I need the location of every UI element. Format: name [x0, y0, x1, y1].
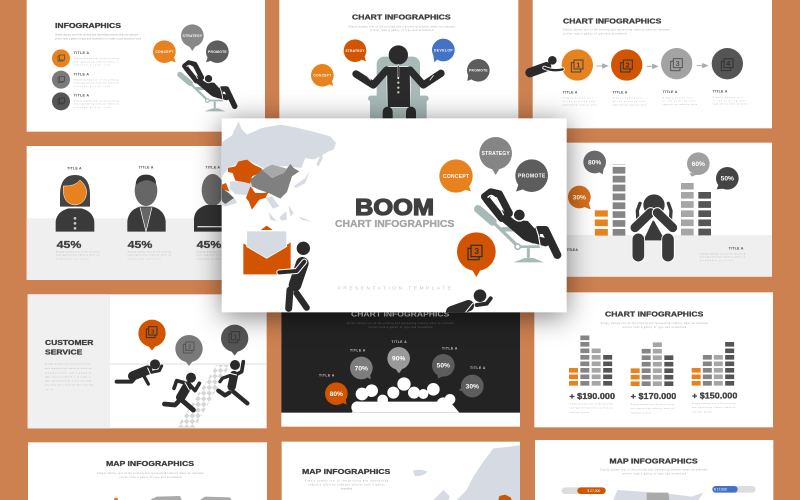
bubble: promote: PROMOTE — [518, 173, 546, 179]
text block: intro — [347, 322, 455, 329]
text block: captions: and typesetting industry when an — [128, 254, 171, 257]
bubble: 80 percent: 80% — [330, 391, 343, 398]
arrow — [697, 64, 707, 68]
bar chart: left — [601, 164, 619, 236]
figures: 45 percent: 45% — [128, 240, 152, 251]
text block: intro: printer took a galley of type and scrambled — [119, 476, 182, 479]
figure: plus 190,000: unknown printer — [569, 411, 590, 414]
map: usa — [613, 490, 703, 500]
text block: captions: and typesetting industry when an — [56, 254, 99, 257]
bar chart: right — [687, 183, 705, 235]
text block: captions — [56, 250, 222, 261]
figure: plus 170,000: and typesetting industry when an — [631, 407, 674, 410]
text block: description: Simply dummy text of the printing — [45, 363, 89, 366]
icon: hand over step 1 — [544, 68, 563, 70]
panel: cover slide — [222, 118, 567, 315]
bubble: concept: CONCEPT — [443, 174, 469, 180]
pin 1 — [221, 325, 248, 356]
list: three titled items — [52, 49, 118, 110]
panel: slide reclining infographics — [27, 0, 265, 132]
text block: intro — [97, 472, 204, 479]
person: third with laptop: TITLE A — [205, 166, 220, 170]
text block: captions: unknown printer — [128, 258, 161, 261]
text block: intro — [563, 29, 670, 36]
list: three titled items: unknown printer took — [74, 64, 110, 67]
list: three titled items: Simply dummy text of the printing — [74, 99, 118, 102]
figures: 45 percent — [57, 240, 221, 251]
labels: step titles and text: of the printing and — [613, 100, 644, 103]
icon: person reclining in chair — [180, 63, 235, 111]
heading: customer service: SERVICE — [45, 348, 82, 357]
bar chart: 170,000 — [635, 342, 669, 386]
text block: captions: Simply dummy text — [197, 250, 222, 253]
labels: unknown printer — [700, 259, 734, 262]
bubble: 50 percent: 50% — [437, 363, 450, 370]
panel: slide numbered process — [530, 0, 772, 128]
bubble: 80 percent: TITLE A — [319, 374, 335, 378]
figure: plus 190,000: + $190.000 — [569, 392, 616, 401]
figures: 45 percent: 45% — [57, 240, 81, 251]
labels: Simply dummy text of the printing — [700, 252, 745, 255]
figure: plus 170,000: Simply dummy text of the printing — [631, 403, 674, 406]
text block: captions: Simply dummy text of the printing — [56, 250, 99, 253]
person: man: TITLE A — [139, 166, 154, 170]
step 3 — [661, 48, 692, 79]
title: boom: BOOM — [355, 194, 434, 220]
labels: step titles and text: of the printing and — [563, 100, 594, 103]
text block: description: type and scrambled it to make a — [45, 375, 91, 378]
icon: businessman in armchair — [356, 45, 441, 125]
text block: intro: Simply dummy text of the printing and typesetting industry when an unknown — [55, 33, 139, 36]
bubble: 50 percent — [716, 167, 739, 190]
text block: captions: and typesetting — [197, 254, 222, 257]
bubble: concept — [439, 159, 473, 193]
text block: description: type specimen book it has survived — [45, 380, 91, 383]
bubble: promote: PROMOTE — [208, 50, 227, 54]
text block: description: and typesetting industry when an — [45, 367, 92, 370]
figure: plus 150,000: unknown printer — [692, 410, 712, 413]
labels: step titles and text: Simply dummy text — [663, 96, 693, 99]
bubble: numbered 3 — [457, 232, 496, 277]
list: three titled items: TITLE A — [74, 72, 89, 76]
text block: intro: printer took a galley of type and scrambled — [368, 326, 433, 329]
list: three titled items: Simply dummy text of the printing — [74, 78, 118, 81]
labels: step titles and text: of the printing and — [713, 99, 744, 102]
bubble: concept — [153, 40, 176, 63]
bubble: 80 percent: 80% — [588, 159, 601, 166]
person: woman — [56, 166, 94, 232]
labels: step titles and text: Simply dummy text — [613, 97, 643, 100]
figure: plus 170,000: unknown printer — [631, 412, 651, 415]
bubble: strategy — [181, 24, 204, 51]
list: three titled items: Simply dummy text of the printing — [74, 57, 118, 60]
bubble: strategy: STRATEGY — [183, 34, 203, 38]
bubble: concept: CONCEPT — [155, 50, 173, 54]
panel: slide three people — [27, 146, 270, 280]
text block: intro: Simply dummy text of the printing and typesetting industry when an unknown — [563, 29, 670, 32]
text block: intro: printer took a galley of type and scrambled — [623, 473, 687, 476]
track — [110, 364, 267, 428]
heading: map infographics: MAP INFOGRAPHICS — [302, 467, 390, 476]
text block: intro — [305, 479, 389, 490]
icon: crawling person — [117, 359, 162, 384]
labels: step titles and text: typesetting industry when — [563, 103, 597, 106]
pin 3: 3 — [151, 329, 154, 335]
text block: intro: Simply dummy text of the printing and typesetting industry when an unknown — [347, 322, 455, 325]
bubble: concept: CONCEPT — [313, 74, 331, 78]
text block: intro: Simply dummy text of the printing and typesetting industry when an unknown — [348, 25, 456, 28]
labels: step titles and text: typesetting industry when — [663, 103, 697, 106]
bubble: 30 percent — [459, 366, 486, 397]
list: three titled items: TITLE A — [74, 51, 89, 55]
text block: description: not only five centuries but also the — [45, 384, 94, 387]
bubble: 70 percent: TITLE A — [350, 349, 366, 353]
world map fragment — [114, 496, 232, 500]
list: three titled items: unknown printer took — [74, 85, 110, 88]
figure: plus 150,000: and typesetting industry when an — [692, 406, 735, 409]
bubble: develop — [432, 39, 455, 62]
text block: intro: Simply dummy text of the printing and typesetting industry when an unknown — [600, 469, 708, 472]
list: three titled items: and typesetting industry when an — [74, 103, 118, 106]
icon: person offering hand — [530, 56, 557, 73]
panel: slide boss in armchair — [279, 0, 518, 125]
text block: intro — [600, 469, 708, 476]
clouds — [351, 377, 459, 413]
pin 3 — [138, 320, 166, 351]
bubble: 30 percent: 30% — [466, 383, 479, 390]
heading: infographics: INFOGRAPHICS — [55, 21, 121, 30]
list: three titled items: and typesetting industry when an — [74, 82, 118, 85]
labels: step titles and text: Simply dummy text — [563, 97, 593, 100]
text block: intro: printer took a galley of type and scrambled — [370, 29, 434, 32]
tagline: presentation template: PRESENTATION TEMPLATE — [338, 286, 451, 291]
bubble: 50 percent: TITLE A — [442, 346, 458, 350]
panel: slide head in hands — [500, 143, 772, 277]
bubble: 30 percent — [568, 186, 591, 209]
pill bar: blue value — [712, 486, 756, 493]
figure: plus 150,000: + $150.000 — [692, 391, 738, 400]
bubble: 60 percent — [687, 152, 710, 177]
panel: dark slide clouds — [281, 310, 520, 427]
step 1 — [562, 49, 593, 81]
map: asia — [222, 121, 336, 221]
labels: TITLE A — [729, 247, 744, 251]
text block: intro: printer took a galley of type and scrambled it to make a type specimen book — [55, 37, 142, 40]
bubble: concept — [311, 64, 334, 87]
text block: intro — [348, 25, 456, 32]
step 1: 1 — [576, 60, 580, 69]
labels: step titles and text: typesetting industry when — [713, 103, 747, 106]
heading: chart infographics: CHART INFOGRAPHICS — [351, 310, 449, 319]
figure: plus 170,000: + $170.000 — [631, 392, 677, 401]
text block: intro — [601, 322, 709, 329]
heading: chart infographics: CHART INFOGRAPHICS — [605, 309, 703, 318]
icon: person carrying envelope — [279, 242, 310, 308]
labels: step titles and text: TITLE A — [663, 90, 678, 94]
icon: running person — [164, 373, 199, 410]
bubble: promote — [206, 40, 229, 63]
figure: plus 190,000 — [569, 392, 616, 414]
icon: person with head in hands — [635, 194, 673, 256]
panel: slide map left — [28, 442, 267, 500]
step 2: 2 — [626, 60, 630, 69]
bubble: strategy — [479, 137, 512, 175]
bubble: 30 percent: TITLE A — [470, 366, 486, 370]
bubble: 90 percent: TITLE A — [391, 340, 407, 344]
list: three titled items: unknown printer took — [74, 106, 110, 109]
labels: step titles and text: TITLE A — [613, 90, 628, 94]
figure: plus 190,000: and typesetting industry when an — [569, 406, 613, 409]
labels: step titles and text: Simply dummy text — [713, 96, 743, 99]
pin 1: 1 — [234, 334, 237, 340]
labels: step titles and text: typesetting industry when — [613, 103, 647, 106]
icon: person reclining in chair — [478, 192, 557, 262]
person: woman: TITLE A — [67, 166, 82, 170]
bubble: 50 percent: 50% — [721, 176, 734, 183]
person: third with laptop — [194, 166, 224, 232]
text block: description: unknown printer took a galley of — [45, 371, 91, 374]
bubble: 30 percent: 30% — [573, 194, 586, 201]
labels — [567, 247, 745, 262]
text block: intro — [55, 33, 142, 40]
bubble: 80 percent — [319, 374, 348, 405]
text block: intro: Simply dummy text of the printing and typesetting industry when an unknown — [97, 472, 204, 475]
heading: customer service: CUSTOMER — [45, 338, 94, 347]
text block: intro: Simply dummy text of the printing and typesetting industry when an unknown — [601, 322, 709, 325]
bubble: 60 percent: 60% — [692, 161, 705, 168]
panel: slide map europe — [282, 442, 520, 500]
step 2 — [611, 49, 642, 81]
text block: intro: scrambled — [341, 487, 353, 490]
figure: plus 150,000 — [692, 391, 738, 413]
bubble: 90 percent — [387, 340, 410, 373]
panel: slide customer service — [28, 294, 267, 428]
labels: and typesetting industry when an — [700, 256, 745, 259]
pin 2: 2 — [188, 345, 191, 351]
person: man — [127, 166, 166, 232]
figures: 45 percent: 45% — [197, 240, 221, 251]
bubble: 50 percent — [432, 346, 458, 379]
bubble: 80 percent — [583, 151, 606, 174]
list: three titled items: TITLE A — [74, 94, 89, 98]
arrow — [647, 64, 657, 68]
bubble: promote — [515, 159, 548, 192]
labels: step titles and text: of the printing and — [663, 100, 694, 103]
icon: envelope — [243, 226, 291, 274]
pin 2 — [175, 335, 203, 366]
text block: intro: printer took a galley of type and scrambled — [563, 33, 627, 36]
bubble: promote — [467, 59, 490, 82]
text block: intro: printer took a galley of type and scrambled — [623, 326, 687, 329]
labels: step titles and text — [563, 90, 747, 106]
shadow: behind cover slide — [222, 122, 567, 317]
text block: captions: unknown printer — [56, 258, 90, 261]
bubble: 70 percent — [350, 349, 373, 379]
heading: chart infographics: CHART INFOGRAPHICS — [563, 16, 661, 25]
bubble: strategy: STRATEGY — [345, 49, 365, 53]
text block: intro: Simply dummy text of the printing and typesetting — [305, 479, 389, 482]
labels: TITLE A — [567, 248, 578, 252]
subtitle: chart infographics: CHART INFOGRAPHICS — [335, 219, 455, 230]
bubble: strategy — [344, 39, 366, 62]
labels: step titles and text: TITLE A — [563, 91, 578, 95]
bar chart: 150,000 — [696, 341, 730, 386]
pill bar: orange value: $ 27,000 — [587, 489, 600, 493]
figure: plus 170,000 — [631, 392, 677, 415]
icon: crawling person — [452, 289, 491, 315]
text block: captions: unknown printer — [197, 258, 222, 261]
list: three titled items: and typesetting industry when an — [74, 60, 118, 63]
heading: map infographics: MAP INFOGRAPHICS — [106, 459, 194, 468]
bubble: numbered 3: 3 — [474, 246, 479, 256]
bubble: develop: DEVELOP — [434, 48, 453, 52]
heading: chart infographics: CHART INFOGRAPHICS — [352, 13, 451, 22]
text block: captions: Simply dummy text of the printing — [128, 250, 171, 253]
panel: slide map usa — [535, 440, 773, 500]
labels: step titles and text: TITLE A — [713, 90, 728, 94]
heading: customer service — [45, 338, 94, 357]
bubble: strategy: STRATEGY — [482, 151, 510, 157]
bubble: 70 percent: 70% — [355, 365, 368, 372]
step 3: 3 — [676, 59, 680, 68]
icon: victorious runner — [218, 360, 247, 403]
pill bar: blue value: $ 17,000 — [714, 488, 727, 492]
figure: plus 190,000: Simply dummy text of the printing — [569, 402, 613, 405]
bar chart: 190,000 — [574, 335, 608, 386]
map: europe — [413, 445, 520, 500]
heading: map infographics: MAP INFOGRAPHICS — [609, 456, 698, 465]
bubble: 90 percent: 90% — [392, 356, 405, 363]
arrow — [597, 64, 607, 68]
text block: intro: industry when an unknown printer took a galley — [309, 483, 385, 486]
step 4 — [712, 48, 743, 79]
bubble: promote: PROMOTE — [469, 69, 488, 73]
text block: description: leap — [45, 389, 54, 391]
pill bar: orange value — [562, 487, 606, 494]
figure: plus 150,000: Simply dummy text of the printing — [692, 402, 735, 405]
step 4: 4 — [726, 59, 731, 68]
text block: description — [45, 363, 94, 391]
panel: slide revenue bars — [534, 292, 773, 427]
